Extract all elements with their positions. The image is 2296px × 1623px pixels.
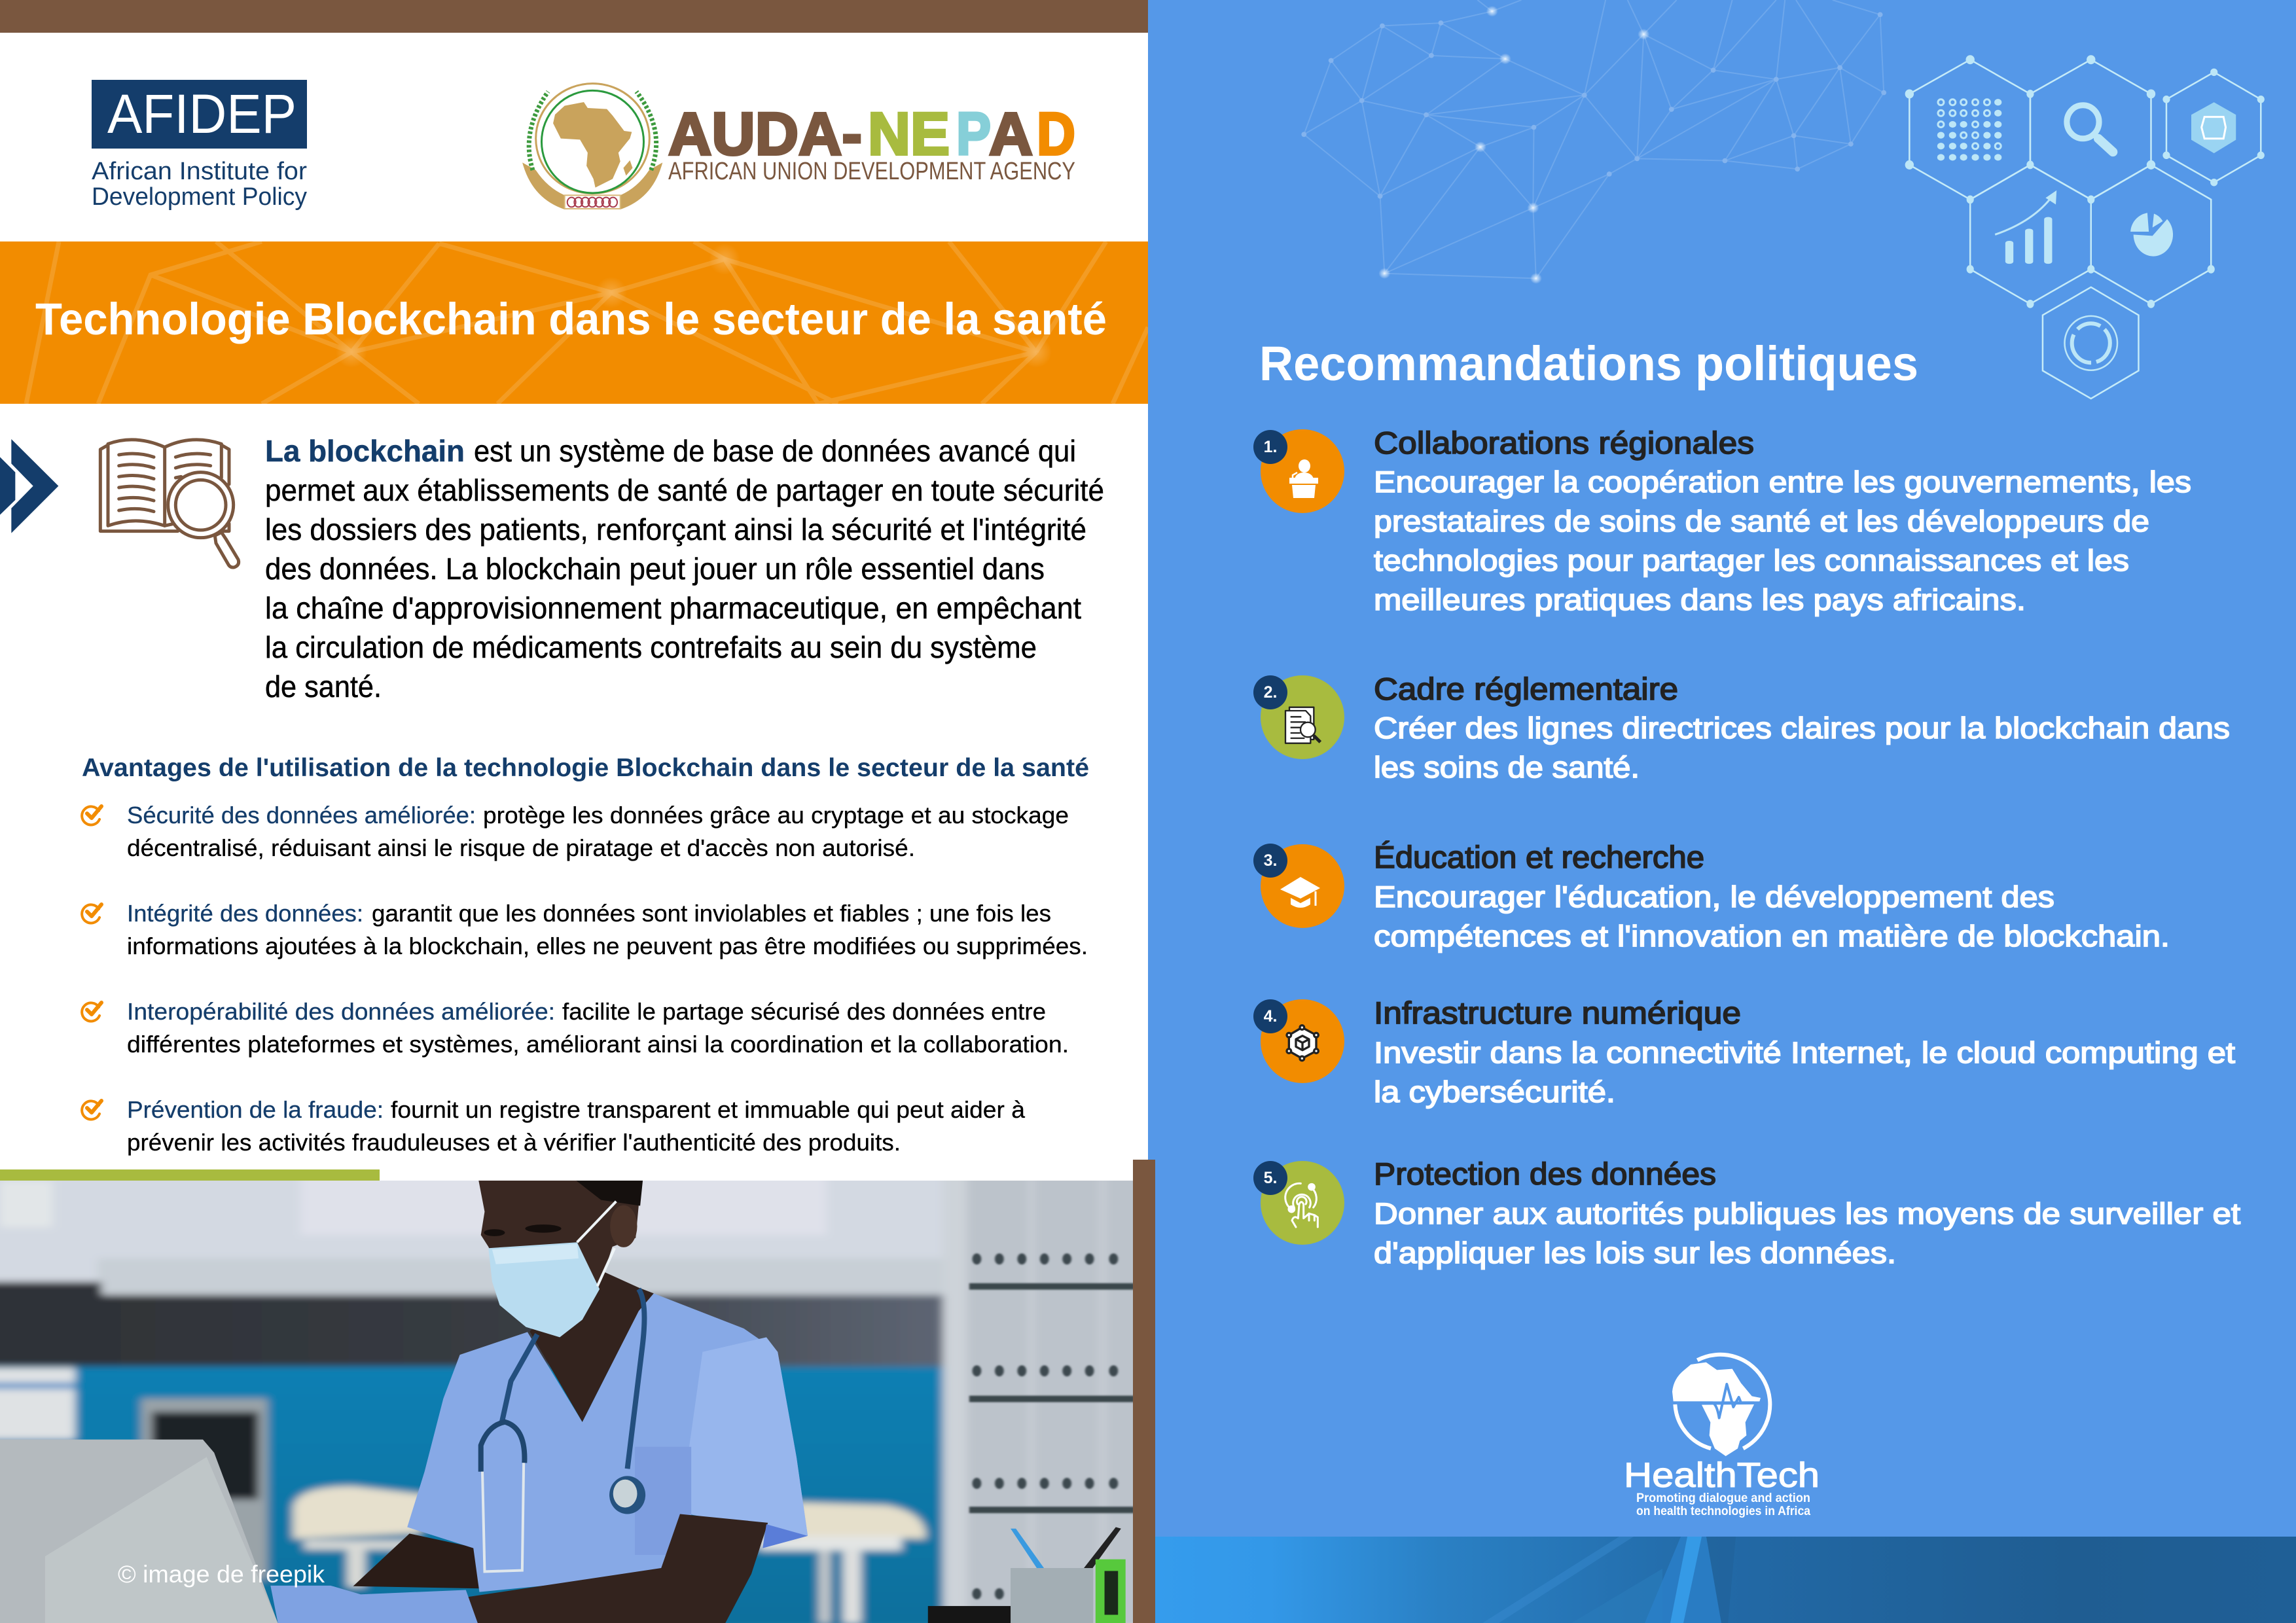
icon: network cube xyxy=(1253,999,1344,1083)
icon: small hexagon xyxy=(2191,102,2236,153)
benefit 1: protège les données grâce au cryptage et au stockage xyxy=(483,802,1069,829)
title: Technologie Blockchain dans le secteur de la santé xyxy=(35,294,1107,344)
icon: document search: 2. xyxy=(1264,683,1277,702)
benefit 3: Interopérabilité des données améliorée: xyxy=(127,998,555,1025)
benefit 2: garantit que les données sont inviolables et fiables ; une fois les xyxy=(372,900,1051,927)
benefit 3: facilite le partage sécurisé des données entre xyxy=(562,998,1046,1025)
logo: HealthTech: on health technologies in Africa xyxy=(1636,1505,1810,1518)
text block: intro: de santé. xyxy=(265,669,382,704)
footer band xyxy=(1155,1537,2296,1623)
text block: intro: La blockchain xyxy=(265,434,465,468)
icon: ring xyxy=(2064,316,2117,370)
recommendation 1 xyxy=(1253,425,2191,616)
right panel background xyxy=(1148,0,2296,1623)
heading: policy recommendations: Recommandations politiques xyxy=(1259,336,1918,391)
logo: HealthTech: Promoting dialogue and action xyxy=(1636,1491,1810,1505)
logo: AUDA-NEPAD emblem xyxy=(522,84,662,209)
heading: benefits: Avantages de l'utilisation de la technologie Blockchain dans le secteur de la santé xyxy=(82,754,1089,782)
icon: check xyxy=(82,904,101,923)
icon: pie chart xyxy=(2130,213,2173,257)
background: network decoration xyxy=(1301,0,1886,284)
recommendation 2 xyxy=(1253,671,2230,784)
benefit 1 xyxy=(82,802,1069,861)
logo: AFIDEP xyxy=(92,80,307,211)
text block: intro xyxy=(265,434,1104,704)
brown vertical strip xyxy=(1133,1160,1155,1623)
logo: AUDA-NEPAD wordmark: A xyxy=(989,101,1033,168)
logo: AUDA-NEPAD wordmark: AFRICAN UNION DEVELOPMENT AGENCY xyxy=(668,158,1075,185)
photo: health worker at laptop xyxy=(0,1171,1142,1623)
logo: AUDA-NEPAD wordmark: P xyxy=(956,101,991,168)
recommendation 5: Donner aux autorités publiques les moyens de surveiller et xyxy=(1374,1197,2241,1230)
recommendation 1: Collaborations régionales xyxy=(1374,425,1754,460)
logo: AFIDEP: AFIDEP xyxy=(107,83,296,145)
recommendation 3: Éducation et recherche xyxy=(1374,840,1704,874)
title band xyxy=(0,241,1148,404)
recommendation 3: Encourager l'éducation, le développement des xyxy=(1374,880,2054,914)
recommendation 1: technologies pour partager les connaissances et les xyxy=(1374,544,2129,577)
recommendation 3 xyxy=(1253,840,2170,953)
green accent bar xyxy=(0,1169,380,1181)
recommendation 4 xyxy=(1253,995,2236,1109)
icon: lectern: 1. xyxy=(1264,438,1277,456)
recommendation 3: compétences et l'innovation en matière de blockchain. xyxy=(1374,919,2170,953)
text block: intro: la circulation de médicaments contrefaits au sein du système xyxy=(265,630,1037,664)
logo: AFIDEP: African Institute for xyxy=(92,158,307,185)
text block: intro: est un système de base de données avancé qui xyxy=(474,434,1076,468)
icon: touch fingerprint: 5. xyxy=(1264,1169,1277,1187)
logo: AUDA-NEPAD wordmark xyxy=(668,101,1075,185)
text block: intro: les dossiers des patients, renforçant ainsi la sécurité et l'intégrité xyxy=(265,512,1086,546)
logo: HealthTech xyxy=(1624,1355,1820,1518)
recommendation 4: Investir dans la connectivité Internet, le cloud computing et xyxy=(1374,1036,2236,1069)
recommendation 4: la cybersécurité. xyxy=(1374,1075,1615,1109)
top brown bar xyxy=(0,0,1148,33)
text block: intro: la chaîne d'approvisionnement pharmaceutique, en empêchant xyxy=(265,591,1081,625)
recommendation 1: Encourager la coopération entre les gouvernements, les xyxy=(1374,465,2191,499)
benefit 4: prévenir les activités frauduleuses et à vérifier l'authenticité des produits. xyxy=(127,1129,901,1156)
icon: dot grid xyxy=(1937,99,2001,161)
benefit 4: fournit un registre transparent et immuable qui peut aider à xyxy=(391,1096,1026,1123)
icon: growth chart xyxy=(1995,190,2056,264)
icon: check xyxy=(82,806,101,825)
benefit 2 xyxy=(82,900,1088,959)
benefit 2: Intégrité des données: xyxy=(127,900,363,927)
icon: network cube: 4. xyxy=(1264,1007,1277,1026)
logo: AFIDEP: Development Policy xyxy=(92,183,307,211)
recommendation 2: les soins de santé. xyxy=(1374,751,1640,784)
recommendation 2: Créer des lignes directrices claires pour la blockchain dans xyxy=(1374,711,2230,745)
text block: intro: des données. La blockchain peut jouer un rôle essentiel dans xyxy=(265,552,1045,586)
icon: touch fingerprint xyxy=(1253,1161,1344,1245)
recommendation 4: Infrastructure numérique xyxy=(1374,995,1741,1030)
benefit 1: Sécurité des données améliorée: xyxy=(127,802,476,829)
photo credit: © image de freepik xyxy=(118,1561,325,1588)
icon: graduation cap xyxy=(1253,844,1344,928)
benefit 4 xyxy=(82,1096,1026,1156)
icon: check xyxy=(82,1101,101,1119)
logo: AUDA-NEPAD wordmark: AUDA- xyxy=(668,101,862,168)
icon cluster: hexagons xyxy=(1905,55,2265,399)
logo: AUDA-NEPAD wordmark: D xyxy=(1037,101,1075,168)
benefit 1: décentralisé, réduisant ainsi le risque de piratage et d'accès non autorisé. xyxy=(127,834,915,861)
recommendation 1: prestataires de soins de santé et les développeurs de xyxy=(1374,505,2149,538)
left panel background xyxy=(0,0,1148,1181)
logo: AUDA-NEPAD wordmark: NE xyxy=(868,101,950,168)
recommendation 5: d'appliquer les lois sur les données. xyxy=(1374,1236,1896,1270)
recommendation 2: Cadre réglementaire xyxy=(1374,671,1678,706)
benefit 3: différentes plateformes et systèmes, améliorant ainsi la coordination et la collaboration. xyxy=(127,1031,1069,1058)
icon: graduation cap: 3. xyxy=(1264,851,1277,870)
recommendation 1: meilleures pratiques dans les pays africains. xyxy=(1374,583,2026,616)
icon: lectern xyxy=(1253,429,1344,513)
text block: intro: permet aux établissements de santé de partager en toute sécurité xyxy=(265,473,1104,507)
benefit 4: Prévention de la fraude: xyxy=(127,1096,384,1123)
icon: document search xyxy=(1253,675,1344,759)
icon: magnifier xyxy=(2067,105,2113,152)
benefit 3 xyxy=(82,998,1069,1058)
recommendation 5: Protection des données xyxy=(1374,1156,1716,1191)
icon: book with magnifier xyxy=(100,440,239,567)
icon: check xyxy=(82,1003,101,1021)
benefit 2: informations ajoutées à la blockchain, elles ne peuvent pas être modifiées ou supprimées. xyxy=(127,933,1088,959)
recommendation 5 xyxy=(1253,1156,2241,1270)
logo: HealthTech: HealthTech xyxy=(1624,1456,1820,1495)
arrow: double chevron xyxy=(0,439,58,533)
